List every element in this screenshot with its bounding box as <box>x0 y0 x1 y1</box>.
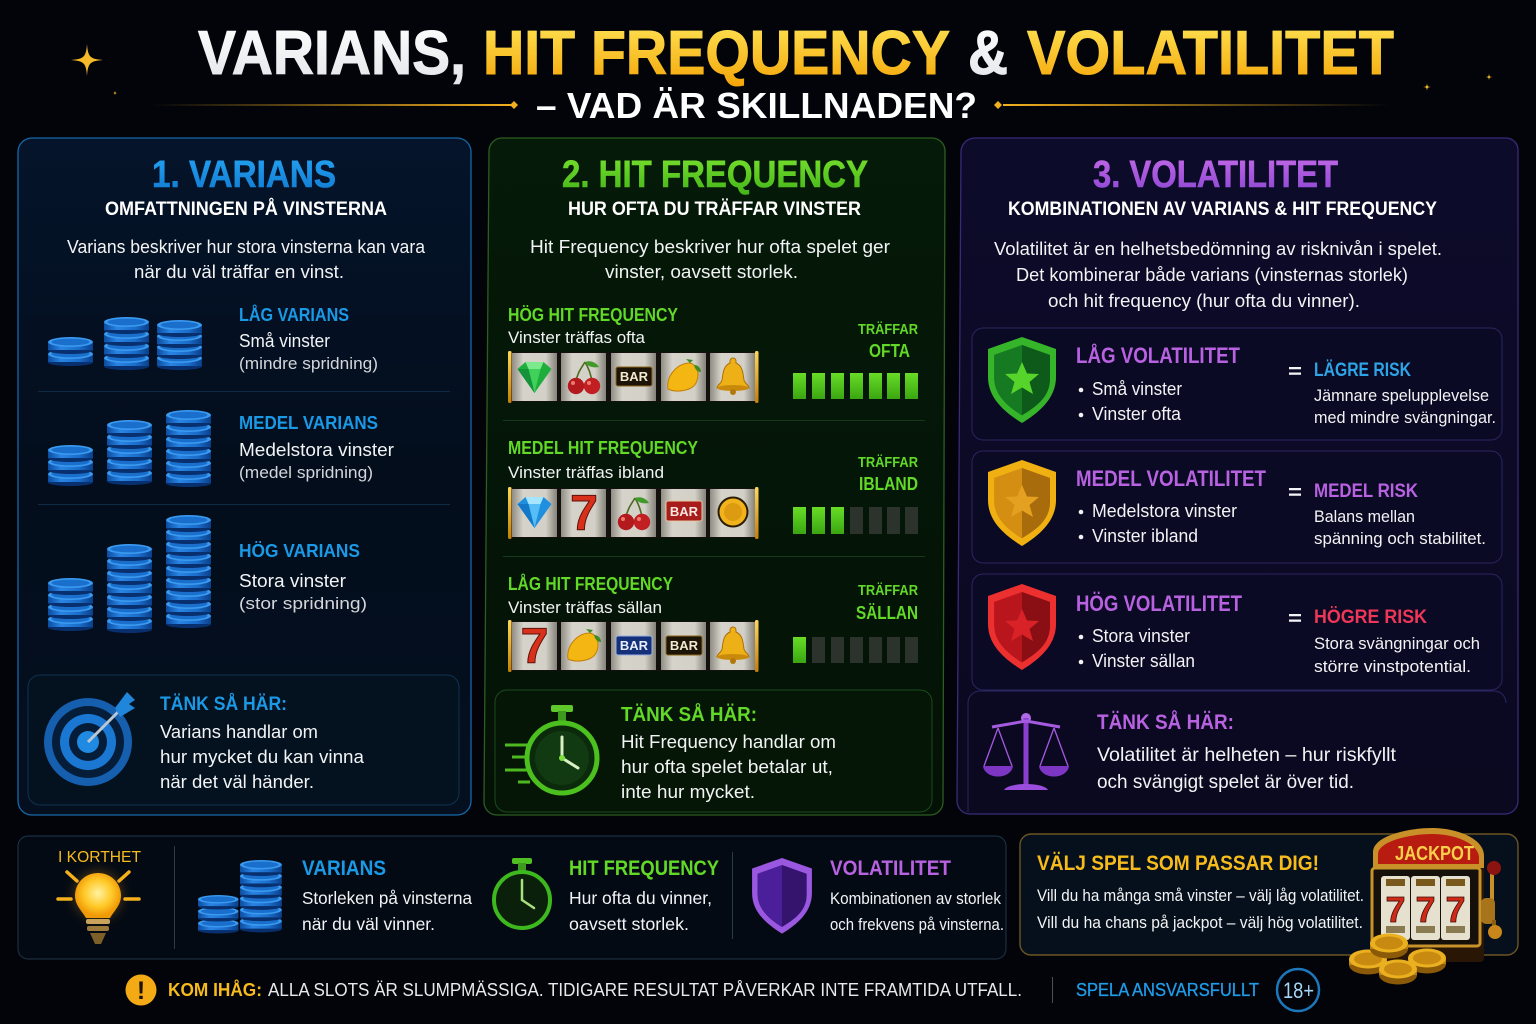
item: varians: när du väl vinner. <box>302 914 435 934</box>
icon: jackpot slot machine: 7 <box>1415 889 1436 930</box>
icon: target with arrow <box>44 692 135 786</box>
row: medel varians: (medel spridning) <box>239 463 373 482</box>
summary strip: i korthet <box>18 836 1006 959</box>
panel: hit frequency <box>484 138 945 815</box>
icon: jackpot slot machine: 7 <box>1445 889 1466 930</box>
item: volatilitet <box>752 857 1004 934</box>
panel subheading: HUR OFTA DU TRÄFFAR VINSTER <box>568 197 861 220</box>
callout: tänk så här volatilitet: och svängigt spelet är över tid. <box>1097 771 1354 793</box>
icon: jackpot slot machine: 7 <box>1385 889 1406 930</box>
responsible gaming notice <box>1076 969 1319 1011</box>
card: hög volatilitet: Vinster sällan <box>1092 651 1195 671</box>
icon: jackpot slot machine: JACKPOT <box>1395 843 1474 865</box>
callout: tänk så här volatilitet <box>968 691 1506 812</box>
callout: tänk så här varians: Varians handlar om <box>160 721 318 742</box>
panel: volatilitet <box>957 138 1518 814</box>
row: hög varians: (stor spridning) <box>239 594 367 613</box>
row heading: låg hit frequency <box>508 573 674 617</box>
icon: warning: ! <box>137 977 145 1005</box>
icon: gold shield <box>988 460 1056 546</box>
meter: hits sometimes: TRÄFFAR <box>858 454 918 471</box>
card: låg volatilitet: LÅG VOLATILITET <box>1076 342 1240 368</box>
item: varians <box>198 857 472 934</box>
slot reel: low <box>508 618 758 674</box>
subtitle with gold rules <box>150 85 1390 126</box>
row heading: hög hit frequency: Vinster träffas ofta <box>508 328 646 347</box>
row heading: medel hit frequency: MEDEL HIT FREQUENCY <box>508 437 699 458</box>
icon: red shield <box>988 584 1056 670</box>
row: medel varians: MEDEL VARIANS <box>239 412 378 433</box>
title <box>198 19 1394 88</box>
card: hög volatilitet: = <box>1288 608 1302 630</box>
slot reel: low: 7 <box>521 618 548 674</box>
card: låg volatilitet: Jämnare spelupplevelse <box>1314 387 1489 405</box>
callout: tänk så här hit frequency: inte hur mycket. <box>621 781 755 802</box>
title: VARIANS, <box>198 19 466 88</box>
row: medel varians: Medelstora vinster <box>239 440 394 460</box>
meter: hits often: OFTA <box>869 340 910 361</box>
callout: tänk så här varians: TÄNK SÅ HÄR: <box>160 691 287 715</box>
card: hög volatilitet: större vinstpotential. <box>1314 658 1471 676</box>
icon: light bulb <box>58 849 141 944</box>
subtitle with gold rules: – VAD ÄR SKILLNADEN? <box>536 85 977 126</box>
meter: hits rarely: SÄLLAN <box>856 602 918 623</box>
card: hög volatilitet: HÖG VOLATILITET <box>1076 591 1242 616</box>
panel description: Hit Frequency beskriver hur ofta spelet ger <box>530 236 890 257</box>
slot reel: medium: 7 <box>570 485 598 541</box>
item: hit frequency: Hur ofta du vinner, <box>569 888 712 908</box>
item: varians: Storleken på vinsterna <box>302 888 472 908</box>
row: hög varians: Stora vinster <box>239 571 346 591</box>
item: volatilitet: Kombinationen av storlek <box>830 890 1002 908</box>
icon: warning <box>126 974 156 1006</box>
card: låg volatilitet: = <box>1288 361 1302 383</box>
icon: jackpot slot machine <box>1349 828 1502 984</box>
panel description <box>530 236 890 282</box>
meter: hits sometimes: IBLAND <box>859 473 918 494</box>
icon: light bulb: I KORTHET <box>58 849 141 866</box>
callout: tänk så här hit frequency: Hit Frequency handlar om <box>621 731 836 752</box>
panel description: när du väl träffar en vinst. <box>134 261 344 282</box>
card: hög volatilitet: HÖGRE RISK <box>1314 607 1427 628</box>
card: hög volatilitet: Stora svängningar och <box>1314 635 1480 653</box>
title: HIT FREQUENCY <box>483 19 950 88</box>
slot reel: high <box>508 351 758 403</box>
card: medel volatilitet: Vinster ibland <box>1092 526 1198 546</box>
card: medel volatilitet: Balans mellan <box>1314 508 1415 526</box>
callout: tänk så här varians: när det väl händer. <box>160 771 314 792</box>
card: låg volatilitet: Små vinster <box>1092 379 1182 399</box>
icon: coin stacks high <box>48 515 211 633</box>
callout: tänk så här volatilitet: TÄNK SÅ HÄR: <box>1097 710 1234 734</box>
panel heading: 1. Varians: 1. VARIANS <box>152 154 336 196</box>
card: medel volatilitet: MEDEL RISK <box>1314 481 1418 502</box>
meter: hits often <box>793 321 918 399</box>
callout: tänk så här hit frequency: TÄNK SÅ HÄR: <box>621 702 757 726</box>
row heading: låg hit frequency: LÅG HIT FREQUENCY <box>508 573 674 594</box>
panel description: Det kombinerar både varians (vinsternas storlek) <box>1016 264 1408 285</box>
slot reel: low: BAR <box>620 638 649 653</box>
card: medel volatilitet: MEDEL VOLATILITET <box>1076 466 1266 491</box>
item: volatilitet: och frekvens på vinsterna. <box>830 916 1004 934</box>
panel heading: 3. Volatilitet: 3. VOLATILITET <box>1093 154 1338 196</box>
card: hög volatilitet <box>972 574 1502 690</box>
callout: tänk så här varians <box>28 675 459 805</box>
panel description: och hit frequency (hur ofta du vinner). <box>1048 290 1360 311</box>
icon: coin stacks low <box>48 317 202 370</box>
item: volatilitet: VOLATILITET <box>830 857 951 880</box>
panel subheading: KOMBINATIONEN AV VARIANS & HIT FREQUENCY <box>1008 198 1437 220</box>
icon: green shield <box>988 337 1056 423</box>
card: hög volatilitet: Stora vinster <box>1092 626 1190 646</box>
callout: välj spel <box>1020 834 1518 955</box>
row heading: hög hit frequency <box>508 304 679 347</box>
row: låg varians: LÅG VARIANS <box>239 304 349 325</box>
card: medel volatilitet: Medelstora vinster <box>1092 501 1237 521</box>
item: hit frequency: oavsett storlek. <box>569 914 689 934</box>
reminder bar <box>126 974 1053 1006</box>
card: låg volatilitet <box>972 328 1502 440</box>
meter: hits often: TRÄFFAR <box>858 321 918 338</box>
row heading: hög hit frequency: HÖG HIT FREQUENCY <box>508 304 679 325</box>
meter: hits rarely: TRÄFFAR <box>858 582 918 599</box>
row: låg varians: Små vinster <box>239 331 330 351</box>
slot reel: medium: BAR <box>670 504 699 519</box>
meter: hits sometimes <box>793 454 918 534</box>
item: hit frequency <box>494 857 719 934</box>
icon: balance scale <box>983 713 1069 790</box>
panel subheading: OMFATTNINGEN PÅ VINSTERNA <box>105 196 387 220</box>
title: & <box>968 19 1008 88</box>
callout: välj spel: Vill du ha chans på jackpot – välj hög volatilitet. <box>1037 913 1363 932</box>
slot reel: medium <box>508 485 758 541</box>
responsible gaming notice: SPELA ANSVARSFULLT <box>1076 980 1259 1000</box>
item: varians: VARIANS <box>302 857 386 880</box>
responsible gaming notice: 18+ <box>1283 978 1314 1003</box>
callout: tänk så här varians: hur mycket du kan vinna <box>160 746 365 767</box>
icon: stopwatch <box>505 705 597 793</box>
row heading: medel hit frequency: Vinster träffas ibland <box>508 463 664 482</box>
decorative stars <box>71 44 1493 96</box>
slot reel: low: BAR <box>670 638 699 653</box>
card: medel volatilitet: spänning och stabilitet. <box>1314 530 1486 548</box>
panel description: vinster, oavsett storlek. <box>605 261 798 282</box>
row: hög varians: HÖG VARIANS <box>239 540 360 561</box>
meter: hits rarely <box>793 582 918 663</box>
callout: tänk så här hit frequency <box>495 690 932 812</box>
panel: varians <box>18 138 471 815</box>
callout: tänk så här hit frequency: hur ofta spelet betalar ut, <box>621 756 833 777</box>
title: VOLATILITET <box>1027 19 1394 88</box>
icon: coin stacks medium <box>48 410 211 487</box>
card: låg volatilitet: LÄGRE RISK <box>1314 360 1411 381</box>
row: medel varians <box>239 412 394 482</box>
panel description <box>67 236 426 282</box>
card: låg volatilitet: Vinster ofta <box>1092 404 1182 424</box>
row: låg varians: (mindre spridning) <box>239 354 378 373</box>
slot reel: high: BAR <box>620 369 649 384</box>
callout: tänk så här volatilitet: Volatilitet är helheten – hur riskfyllt <box>1097 744 1397 766</box>
card: medel volatilitet <box>972 451 1502 563</box>
panel description <box>994 238 1442 311</box>
card: låg volatilitet: med mindre svängningar. <box>1314 409 1496 427</box>
card: medel volatilitet: = <box>1288 482 1302 504</box>
panel description: Varians beskriver hur stora vinsterna kan vara <box>67 236 426 257</box>
callout: välj spel: VÄLJ SPEL SOM PASSAR DIG! <box>1037 852 1319 875</box>
panel description: Volatilitet är en helhetsbedömning av risknivån i spelet. <box>994 238 1442 259</box>
row heading: medel hit frequency <box>508 437 699 482</box>
row: låg varians <box>239 304 378 373</box>
reminder bar: KOM IHÅG: <box>168 980 262 1000</box>
reminder bar: ALLA SLOTS ÄR SLUMPMÄSSIGA. TIDIGARE RESULTAT PÅVERKAR INTE FRAMTIDA UTFALL. <box>268 980 1022 1000</box>
item: hit frequency: HIT FREQUENCY <box>569 857 719 880</box>
callout: välj spel: Vill du ha många små vinster – välj låg volatilitet. <box>1037 886 1364 905</box>
row: hög varians <box>239 540 367 613</box>
panel heading: 2. Hit Frequency: 2. HIT FREQUENCY <box>562 154 868 196</box>
row heading: låg hit frequency: Vinster träffas sällan <box>508 598 662 617</box>
